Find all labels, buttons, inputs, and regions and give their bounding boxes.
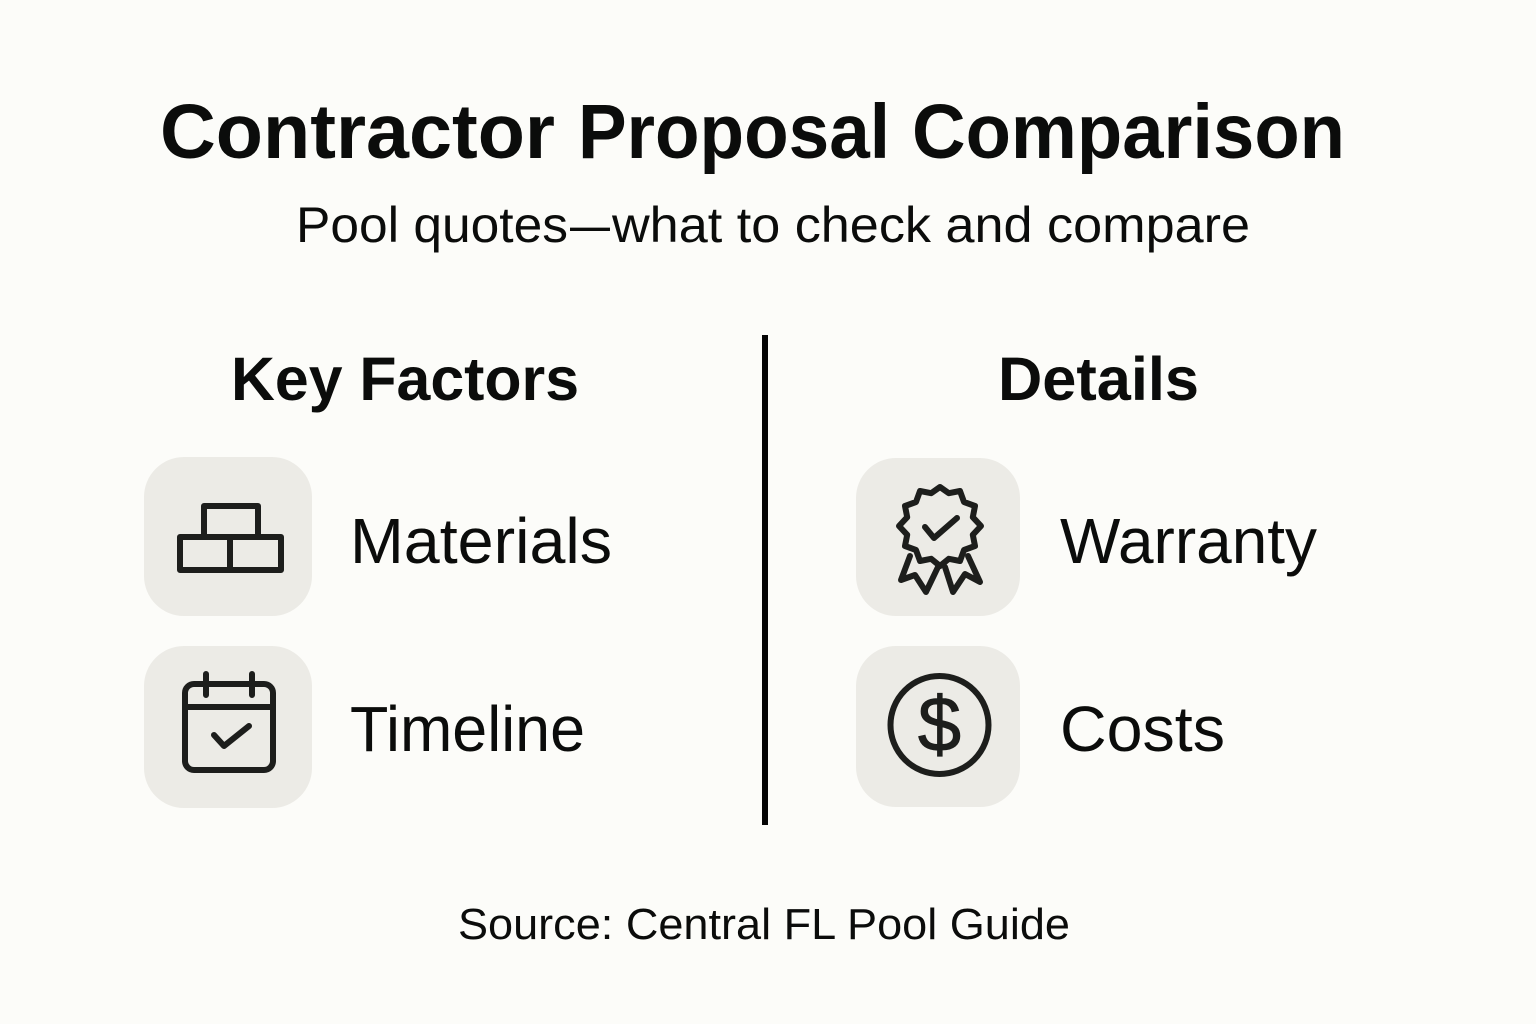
label: materials: Materials: [350, 505, 612, 577]
divider between columns: [762, 335, 768, 825]
icon: dollar coin: [890, 676, 988, 774]
icon tile: materials: [144, 457, 312, 616]
icon tile: warranty: [856, 458, 1020, 616]
source note: Source: Central FL Pool Guide: [458, 900, 1070, 949]
item: materials: [144, 457, 612, 616]
label: timeline: Timeline: [350, 693, 585, 765]
heading: key factors: Key Factors: [231, 345, 579, 413]
item: warranty: [856, 458, 1317, 616]
icon tile: costs: [856, 646, 1020, 807]
subtitle: —: [570, 197, 610, 253]
title: Comparison: [912, 89, 1345, 175]
icon: bricks: [180, 506, 281, 570]
icon: calendar with check: [185, 674, 273, 770]
item: timeline: [144, 646, 585, 808]
label: warranty: Warranty: [1060, 505, 1317, 577]
icon: award rosette with check: [899, 487, 981, 592]
title: Contractor: [160, 89, 555, 175]
icon: dollar coin: $: [918, 680, 961, 768]
icon tile: timeline: [144, 646, 312, 808]
title: Proposal: [578, 89, 890, 175]
item: costs: [856, 646, 1225, 807]
subtitle: Pool quotes: [296, 197, 568, 253]
subtitle: what to check and compare: [611, 197, 1250, 253]
heading: details: Details: [998, 345, 1199, 413]
label: costs: Costs: [1060, 693, 1225, 765]
